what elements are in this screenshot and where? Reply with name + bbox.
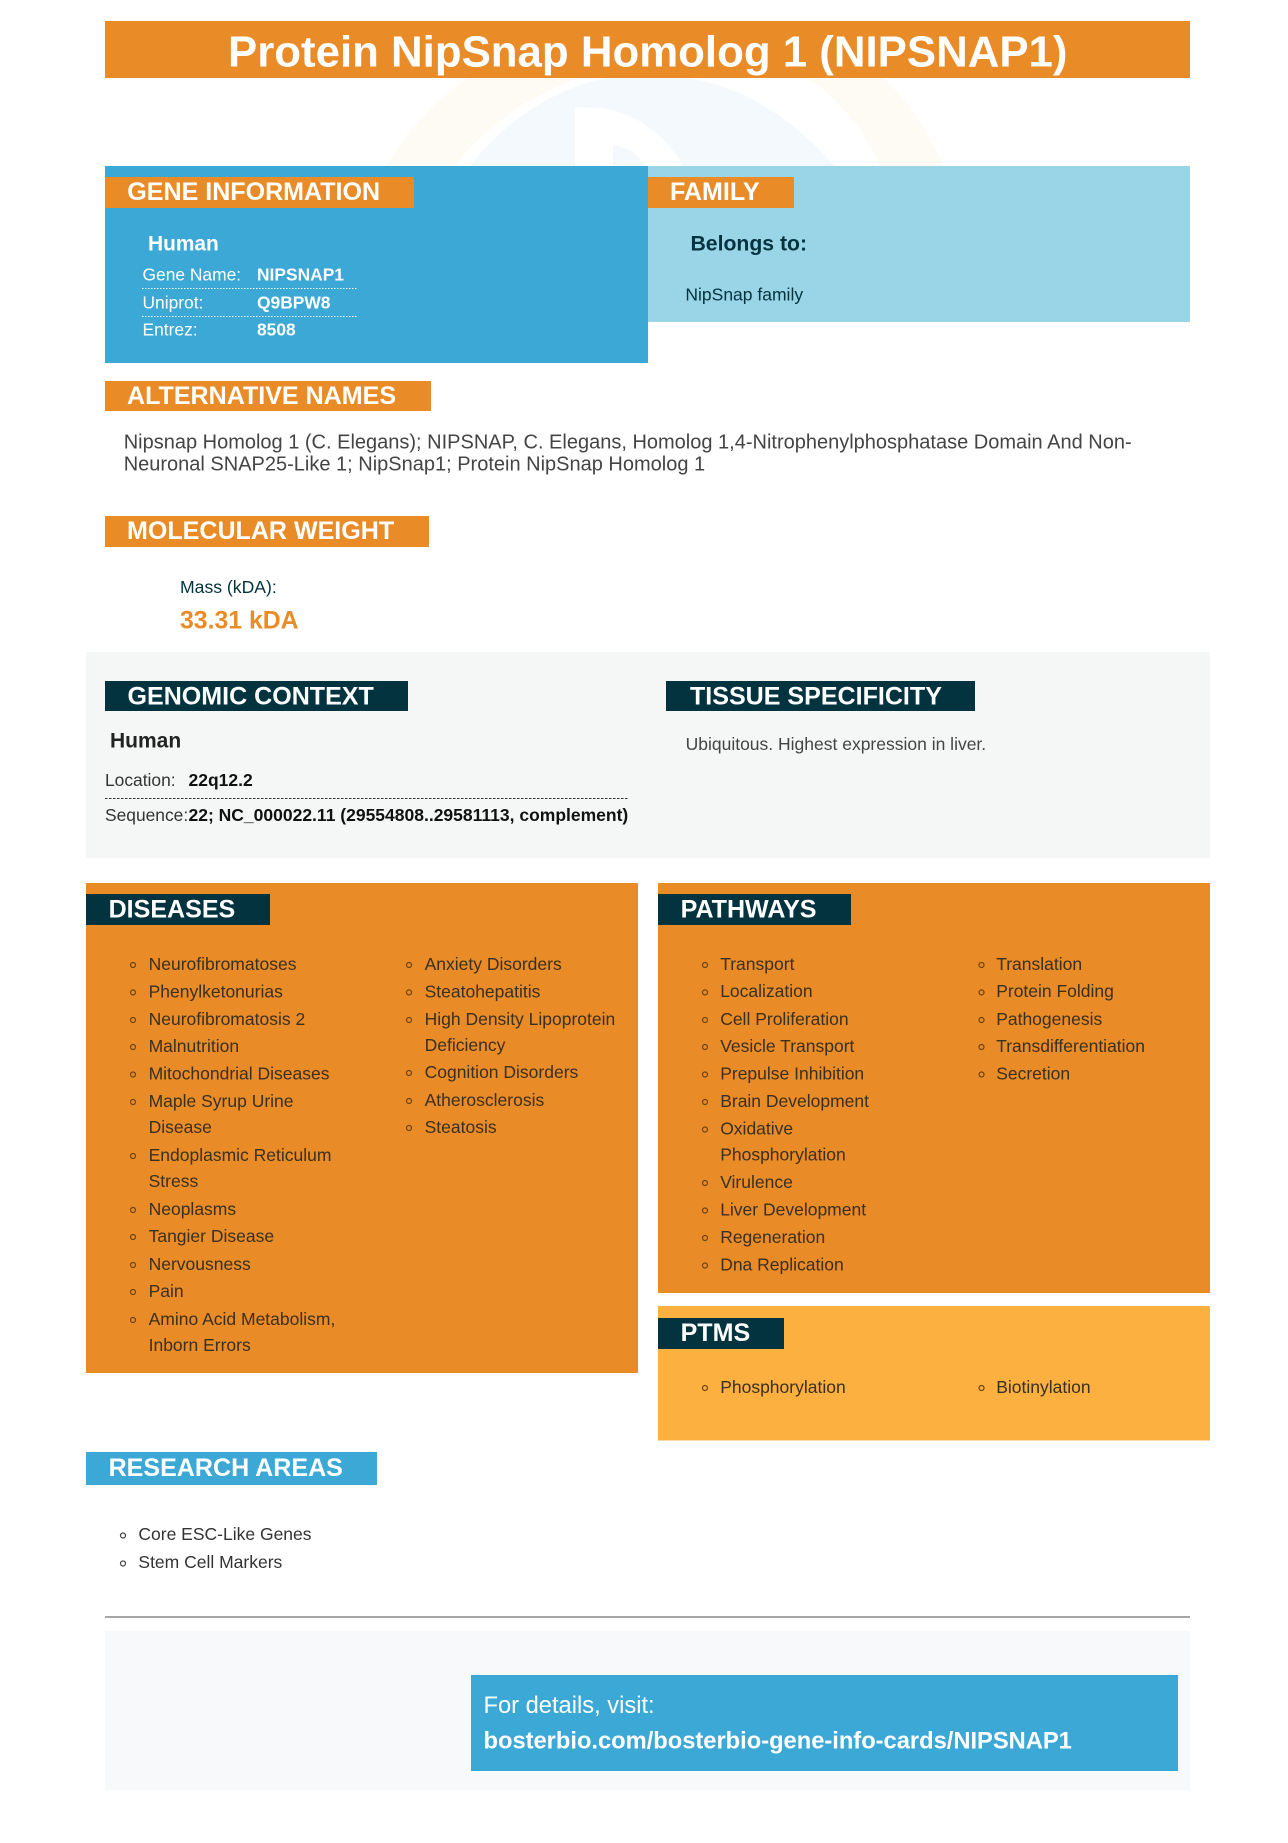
research areas list: Core ESC-Like Genes [138,1524,312,1544]
gene name row: Gene Name: [142,265,241,285]
diseases list column 1: Endoplasmic Reticulum [149,1145,331,1165]
heading: tissue specificity: TISSUE SPECIFICITY [690,683,942,711]
pathways list column 1: Brain Development [720,1091,869,1111]
ptms list column 1: Phosphorylation [720,1377,846,1397]
panel: gene information [105,166,648,363]
pathways list column 1: Phosphorylation [720,1144,846,1164]
location row: 22q12.2 [188,770,253,790]
heading: pathways [658,894,851,925]
diseases list column 1: Disease [149,1117,212,1137]
research areas list: Stem Cell Markers [138,1552,283,1572]
diseases list column 1: Tangier Disease [149,1226,274,1246]
pathways list column 2: Translation [996,954,1082,974]
uniprot row: Uniprot: [142,292,203,312]
heading: diseases [86,894,270,925]
mass label: Mass (kDA): [180,577,277,597]
diseases list column 2: Atherosclerosis [425,1090,544,1110]
title banner: Protein NipSnap Homolog 1 (NIPSNAP1) [228,28,1068,77]
diseases list column 1: Neurofibromatoses [149,954,297,974]
diseases list column 2 [406,954,615,1137]
panel: family [648,166,1190,322]
heading: gene information: GENE INFORMATION [127,178,380,206]
pathways list column 1: Oxidative [720,1118,793,1138]
diseases list column 1: Amino Acid Metabolism, [149,1309,335,1329]
mass value: 33.31 kDA [180,608,299,635]
uniprot row [142,292,331,312]
section: research areas [86,1452,377,1572]
pathways list column 1: Cell Proliferation [720,1009,849,1029]
sequence row: 22; NC_000022.11 (29554808..29581113, complement) [188,805,628,825]
diseases list column 1 [130,954,335,1355]
entrez row [142,320,296,340]
diseases list column 2: Cognition Disorders [425,1062,579,1082]
section: alternative names [105,381,1132,476]
pathways list column 2: Pathogenesis [996,1009,1103,1029]
pathways list column 1: Prepulse Inhibition [720,1064,864,1084]
sequence row: Sequence: [105,805,188,825]
alternative names text [124,432,1132,476]
pathways list column 2: Secretion [996,1064,1070,1084]
pathways list column 1: Virulence [720,1172,793,1192]
heading: family [648,177,794,208]
diseases list column 1: Nervousness [149,1254,251,1274]
research areas list [120,1524,312,1572]
tissue specificity text: Ubiquitous. Highest expression in liver. [686,734,986,754]
heading: ptms [658,1318,784,1349]
pathways list column 1: Localization [720,981,813,1001]
heading: alternative names: ALTERNATIVE NAMES [127,382,396,410]
panel: genomic context and tissue specificity [86,652,1210,858]
diseases list column 2: Steatosis [425,1117,497,1137]
pathways list column 2 [979,954,1145,1084]
diseases list column 1: Inborn Errors [149,1335,251,1355]
title banner [105,21,1190,78]
diseases list column 2: Deficiency [425,1035,506,1055]
pathways list column 1: Vesicle Transport [720,1036,855,1056]
diseases list column 2: High Density Lipoprotein [425,1009,615,1029]
heading: research areas: RESEARCH AREAS [109,1454,343,1482]
entrez row: 8508 [257,320,296,340]
heading: research areas [86,1452,377,1485]
location row [105,770,253,790]
ptms list column 2: Biotinylation [996,1377,1091,1397]
heading: diseases: DISEASES [109,896,235,924]
diseases list column 1: Pain [149,1281,184,1301]
heading: molecular weight: MOLECULAR WEIGHT [127,517,395,545]
heading: family: FAMILY [670,178,760,206]
location row: Location: [105,770,176,790]
diseases list column 1: Maple Syrup Urine [149,1091,294,1111]
diseases list column 1: Malnutrition [149,1036,239,1056]
pathways list column 2: Transdifferentiation [996,1036,1145,1056]
panel: ptms [658,1306,1210,1440]
diseases list column 2: Steatohepatitis [425,981,541,1001]
alternative names text: Nipsnap Homolog 1 (C. Elegans); NIPSNAP, C. Elegans, Homolog 1,4-Nitrophenylphosphatase Domain And Non- [124,432,1132,454]
pathways list column 1: Dna Replication [720,1254,844,1274]
gene name row [142,265,344,285]
entrez row: Entrez: [142,320,198,340]
diseases list column 1: Neoplasms [149,1199,236,1219]
heading: ptms: PTMS [681,1319,750,1347]
belongs to label: Belongs to: [690,233,807,256]
diseases list column 1: Stress [149,1171,198,1191]
callout: details link: bosterbio.com/bosterbio-gene-info-cards/NIPSNAP1 [484,1728,1072,1754]
species label: Human [110,730,181,753]
pathways list column 1 [702,954,869,1274]
diseases list column 1: Neurofibromatosis 2 [149,1009,305,1029]
panel: diseases [86,883,638,1373]
section: molecular weight [105,516,429,635]
diseases list column 1: Phenylketonurias [149,981,283,1001]
diseases list column 1: Mitochondrial Diseases [149,1064,330,1084]
pathways list column 1: Liver Development [720,1200,866,1220]
pathways list column 1: Transport [720,954,795,974]
watermark logo [384,60,945,170]
heading: genomic context: GENOMIC CONTEXT [128,683,374,711]
uniprot row: Q9BPW8 [257,292,331,312]
heading: pathways: PATHWAYS [681,896,817,924]
pathways list column 2: Protein Folding [996,981,1114,1001]
pathways list column 1: Regeneration [720,1227,825,1247]
callout: details link: For details, visit: [484,1693,655,1719]
gene name row: NIPSNAP1 [257,265,344,285]
callout: details link [471,1675,1178,1771]
family name: NipSnap family [685,285,803,305]
panel: pathways [658,883,1210,1293]
diseases list column 2: Anxiety Disorders [425,954,562,974]
species label: Human [148,233,219,256]
panel: footer [105,1631,1190,1790]
alternative names text: Neuronal SNAP25-Like 1; NipSnap1; Protein NipSnap Homolog 1 [124,454,705,476]
